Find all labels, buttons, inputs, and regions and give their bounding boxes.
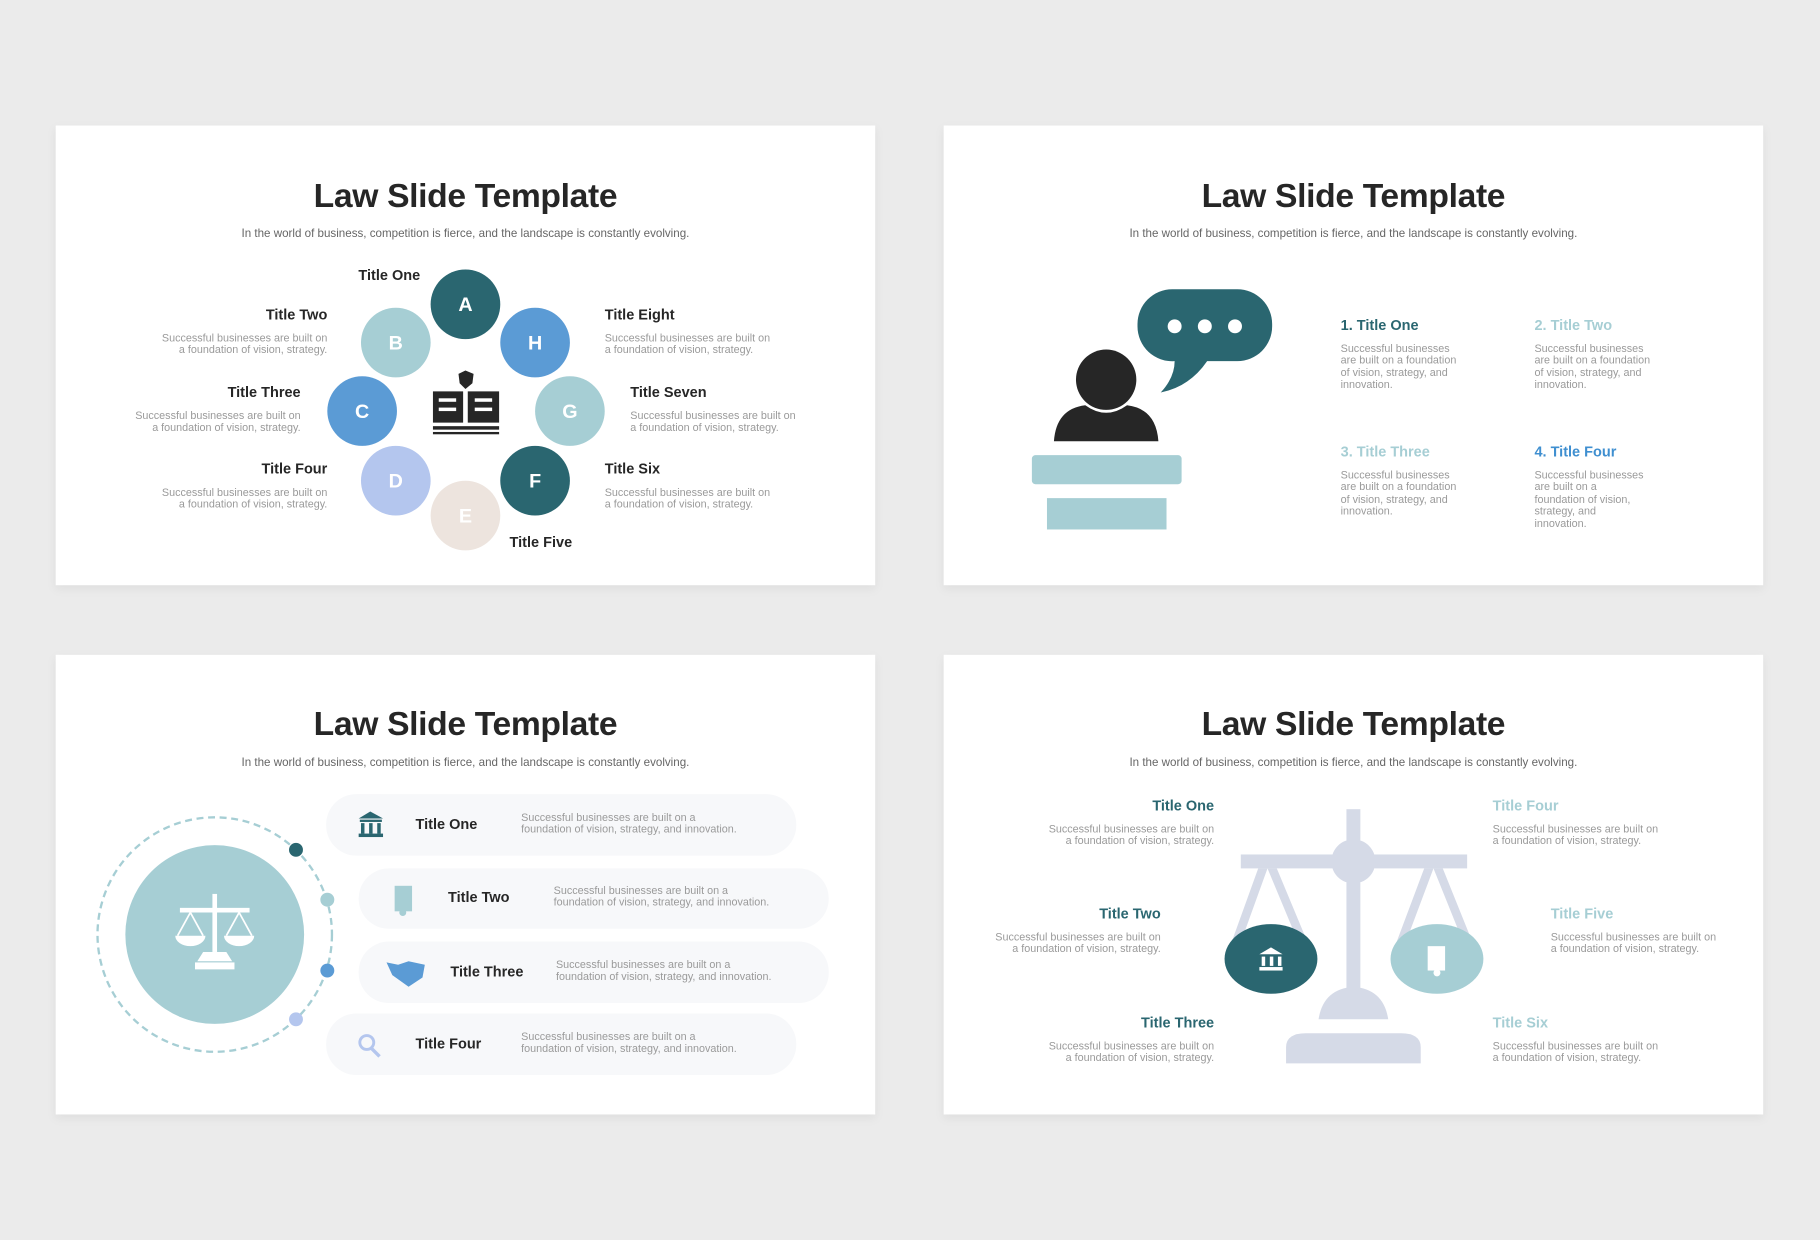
text blocks: of vision, strategy, and — [1341, 367, 1448, 379]
row: Title One: Successful businesses are built on a — [521, 812, 696, 824]
right labels: Title Eight — [605, 307, 675, 323]
heading: Law Slide Template — [314, 706, 617, 743]
left labels: a foundation of vision, strategy. — [1012, 943, 1161, 955]
text blocks: 2. Title Two — [1534, 318, 1612, 334]
text blocks: innovation. — [1534, 518, 1587, 530]
left labels: Successful businesses are built on — [162, 332, 327, 344]
row: Title One: Title One — [416, 817, 477, 833]
left labels — [995, 798, 1214, 1064]
left labels: Title Three — [1141, 1015, 1214, 1031]
text blocks: 3. Title Three — [1341, 444, 1430, 460]
row: Title Three — [359, 942, 829, 1003]
panel: list slide — [56, 655, 875, 1114]
text blocks: innovation. — [1341, 505, 1393, 517]
circles A-H: H — [528, 333, 542, 355]
right labels: a foundation of vision, strategy. — [1551, 943, 1699, 955]
text blocks: are built on a foundation — [1341, 481, 1456, 493]
right labels: Successful businesses are built on — [1493, 823, 1658, 835]
row: Title One: foundation of vision, strategy, and innovation. — [521, 823, 737, 835]
right labels: a foundation of vision, strategy. — [630, 422, 779, 434]
right labels: a foundation of vision, strategy. — [1493, 835, 1641, 847]
subtitle: In the world of business, competition is fierce, and the landscape is constantly evolving. — [241, 227, 689, 240]
row: Title Three: foundation of vision, strategy, and innovation. — [556, 971, 772, 983]
row: Title Two: foundation of vision, strategy, and innovation. — [554, 897, 769, 909]
circles A-H: B — [389, 333, 403, 355]
left labels: Successful businesses are built on — [135, 410, 301, 422]
panel: scale slide — [944, 655, 1763, 1114]
right labels — [510, 307, 796, 551]
row: Title Two: Title Two — [448, 890, 510, 906]
text blocks: innovation. — [1341, 379, 1393, 391]
left labels: Successful businesses are built on — [995, 931, 1161, 943]
text blocks: are built on a foundation — [1341, 354, 1456, 366]
circles A-H: E — [459, 505, 472, 527]
text blocks — [1341, 318, 1650, 530]
text blocks: are built on a foundation — [1534, 354, 1650, 366]
left labels: Successful businesses are built on — [1049, 1040, 1214, 1052]
right labels: a foundation of vision, strategy. — [605, 344, 753, 356]
icon: law book — [433, 370, 499, 434]
left labels: Successful businesses are built on — [1049, 823, 1214, 835]
heading: Law Slide Template — [314, 178, 617, 215]
left labels: a foundation of vision, strategy. — [1066, 1052, 1214, 1064]
right labels: Title Five — [510, 535, 572, 551]
text blocks: Successful businesses — [1341, 469, 1450, 481]
text blocks: Successful businesses — [1534, 343, 1644, 355]
row: Title Four — [326, 1013, 796, 1075]
circles A-H: A — [458, 294, 473, 316]
text blocks: Successful businesses — [1534, 469, 1644, 481]
heading: Law Slide Template — [1202, 706, 1505, 743]
panel: speaker slide — [944, 126, 1763, 585]
heading: Law Slide Template — [1202, 178, 1505, 215]
circles A-H — [327, 269, 605, 550]
row: Title Three: Successful businesses are built on a — [556, 959, 730, 971]
right labels: a foundation of vision, strategy. — [605, 498, 753, 510]
text blocks: are built on a — [1534, 481, 1597, 493]
text blocks: foundation of vision, — [1534, 494, 1630, 506]
text blocks: of vision, strategy, and — [1534, 367, 1642, 379]
icon: speaker at podium — [1032, 350, 1182, 529]
text blocks: of vision, strategy, and — [1341, 494, 1448, 506]
text blocks: 4. Title Four — [1534, 444, 1617, 460]
text blocks: strategy, and — [1534, 505, 1596, 517]
left labels: Title Two — [1099, 906, 1161, 922]
right labels — [1493, 798, 1716, 1064]
right labels: Title Six — [605, 462, 660, 478]
row: Title Four: foundation of vision, strategy, and innovation. — [521, 1043, 737, 1055]
panel: circle diagram slide — [56, 126, 875, 585]
right labels: a foundation of vision, strategy. — [1493, 1052, 1641, 1064]
subtitle: In the world of business, competition is fierce, and the landscape is constantly evolving. — [1129, 227, 1577, 240]
left labels: Title Four — [262, 462, 328, 478]
row: Title Three: Title Three — [450, 964, 523, 980]
left labels — [135, 268, 420, 510]
row: Title Four: Title Four — [416, 1036, 482, 1052]
circles A-H: G — [562, 401, 578, 423]
icon: scales of justice — [1225, 809, 1483, 1063]
right labels: Title Four — [1493, 798, 1559, 814]
left labels: Title One — [358, 268, 420, 284]
icon: speech bubble — [1137, 289, 1272, 392]
left labels: a foundation of vision, strategy. — [179, 498, 327, 510]
row: Title Two: Successful businesses are built on a — [554, 885, 728, 897]
right labels: Successful businesses are built on — [605, 332, 770, 344]
right labels: Successful businesses are built on — [1551, 931, 1716, 943]
left labels: a foundation of vision, strategy. — [179, 344, 327, 356]
circles A-H: F — [529, 471, 541, 493]
circles A-H: C — [355, 401, 369, 423]
right labels: Successful businesses are built on — [630, 410, 796, 422]
text blocks: innovation. — [1534, 379, 1587, 391]
right labels: Title Six — [1493, 1015, 1548, 1031]
right labels: Title Five — [1551, 906, 1613, 922]
row: Title One — [326, 794, 796, 856]
left labels: a foundation of vision, strategy. — [1066, 835, 1214, 847]
circles A-H: D — [389, 471, 403, 493]
left labels: a foundation of vision, strategy. — [152, 422, 301, 434]
row: Title Four: Successful businesses are built on a — [521, 1031, 696, 1043]
text blocks: Successful businesses — [1341, 343, 1450, 355]
subtitle: In the world of business, competition is fierce, and the landscape is constantly evolving. — [1129, 756, 1577, 769]
circle with scale icon — [98, 817, 334, 1052]
left labels: Title One — [1152, 798, 1214, 814]
subtitle: In the world of business, competition is fierce, and the landscape is constantly evolving. — [241, 756, 689, 769]
right labels: Successful businesses are built on — [1493, 1040, 1658, 1052]
left labels: Title Two — [266, 307, 327, 323]
row: Title Two — [359, 868, 829, 929]
left labels: Successful businesses are built on — [162, 487, 327, 499]
right labels: Title Seven — [630, 385, 707, 401]
left labels: Title Three — [228, 385, 301, 401]
right labels: Successful businesses are built on — [605, 487, 770, 499]
text blocks: 1. Title One — [1341, 318, 1419, 334]
